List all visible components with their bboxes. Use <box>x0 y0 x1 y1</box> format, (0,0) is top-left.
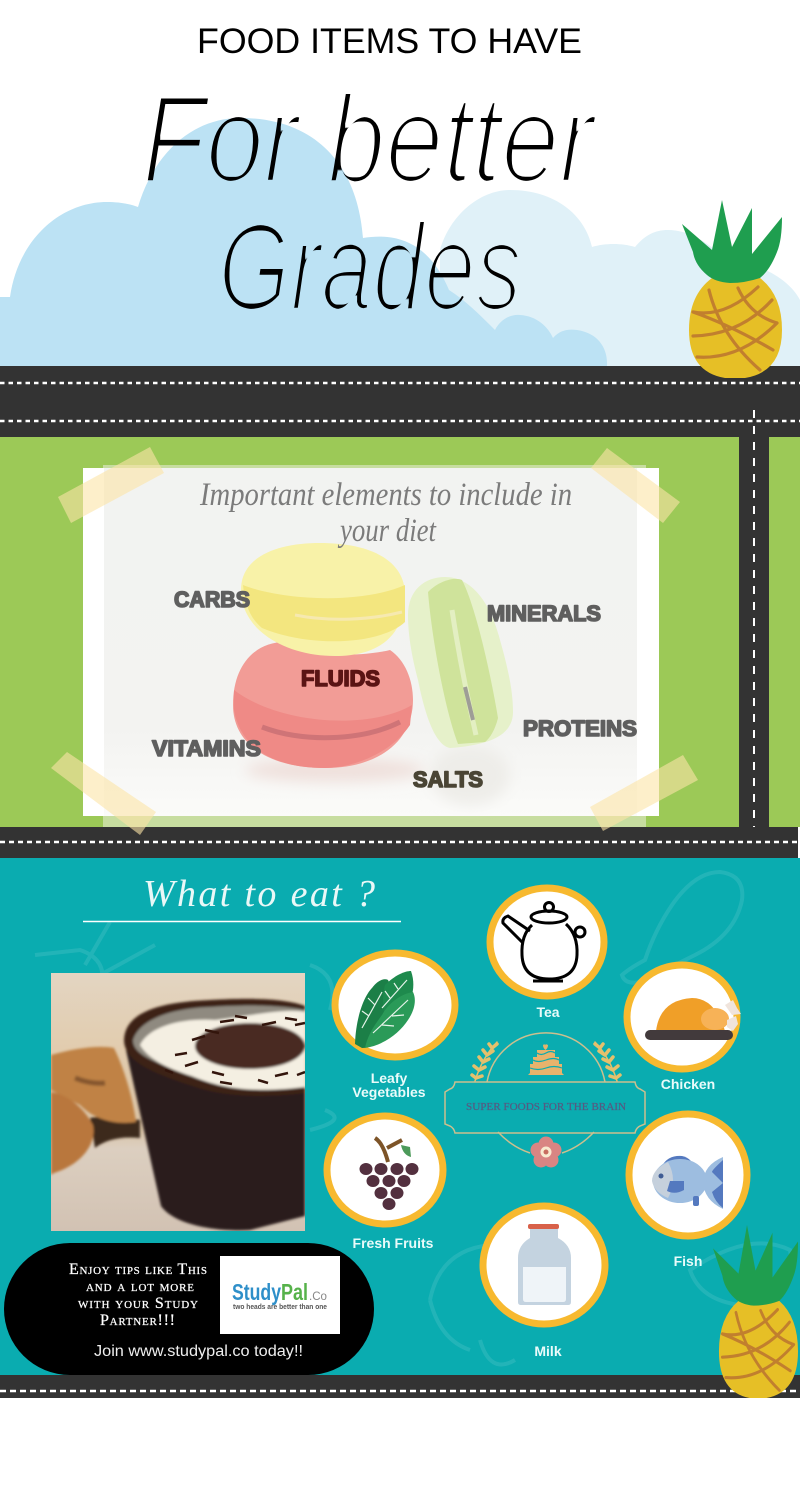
label: tea: Tea <box>536 1004 560 1020</box>
circle: fresh fruits <box>327 1116 443 1224</box>
label: salts: SALTS <box>413 767 483 792</box>
panel: green field <box>0 437 800 827</box>
promo text: with your Study <box>78 1295 198 1312</box>
faint food doodles <box>35 872 791 1364</box>
heading: important elements <box>199 477 572 549</box>
icon: leaves <box>355 971 415 1048</box>
panel: studypal promo <box>4 1243 374 1375</box>
circle: milk <box>483 1206 605 1324</box>
icon: fish <box>652 1156 723 1209</box>
icon: milk bottle <box>518 1224 571 1305</box>
label: leafy vegetables: Leafy <box>371 1070 407 1086</box>
studypal logo: Pal <box>281 1279 308 1305</box>
label: carbs: CARBS <box>174 587 250 612</box>
promo text: Enjoy tips like This <box>69 1261 207 1278</box>
label: fresh fruits: Fresh Fruits <box>353 1235 434 1251</box>
label: chicken: Chicken <box>661 1076 715 1092</box>
label: proteins: PROTEINS <box>523 716 637 741</box>
road: bottom <box>0 1375 800 1398</box>
label: leafy vegetables <box>352 1070 426 1100</box>
photo: coffee and cookies <box>51 973 305 1231</box>
label: milk: Milk <box>534 1343 562 1359</box>
label: minerals: MINERALS <box>487 601 601 626</box>
macaron: pink <box>233 642 413 768</box>
banner <box>445 1082 645 1133</box>
macaron: green <box>408 577 513 748</box>
title: food items: FOOD ITEMS TO HAVE <box>197 22 582 61</box>
icon: pineapple bottom <box>713 1225 798 1398</box>
panel: macaron photo card <box>83 465 659 827</box>
panel: teal section <box>0 858 800 1375</box>
label: leafy vegetables: Vegetables <box>352 1084 426 1100</box>
join text: Join www.studypal.co today!! <box>94 1343 303 1360</box>
label: fluids: FLUIDS <box>301 666 380 691</box>
icon: cake <box>528 1044 564 1075</box>
icon: flower <box>530 1136 562 1168</box>
heading: what to eat: What to eat ? <box>143 873 375 915</box>
heading: important elements: Important elements to include in <box>199 477 572 513</box>
icon: roast chicken <box>645 998 741 1040</box>
studypal logo: two heads are better than one <box>233 1302 327 1311</box>
road: top <box>0 366 800 437</box>
heading: important elements: your diet <box>338 513 437 549</box>
badge: super foods for the brain <box>445 1033 645 1168</box>
promo text: Partner!!! <box>100 1312 175 1329</box>
road: middle <box>0 827 798 858</box>
banner text: SUPER FOODS FOR THE BRAIN <box>466 1102 626 1113</box>
circle: fish <box>629 1114 747 1236</box>
icon: wheat branches <box>472 1042 620 1081</box>
studypal logo: Study <box>232 1279 281 1305</box>
tape strips <box>51 447 698 835</box>
studypal logo <box>220 1256 340 1334</box>
icon: grapes <box>360 1138 418 1210</box>
studypal logo: .Co <box>309 1289 327 1303</box>
macaron: yellow <box>241 543 405 656</box>
icon: teapot <box>503 902 585 981</box>
label: fish: Fish <box>674 1253 702 1269</box>
label: vitamins: VITAMINS <box>152 736 261 761</box>
sprinkles <box>165 1016 305 1084</box>
promo text <box>69 1261 207 1329</box>
icon: pineapple top <box>682 200 782 378</box>
circle: tea <box>490 888 604 996</box>
road: vertical <box>739 410 769 827</box>
circle: leafy vegetables <box>335 953 455 1057</box>
promo text: and a lot more <box>86 1278 194 1295</box>
title script: for better: For better <box>142 71 598 209</box>
clouds <box>0 118 800 366</box>
circle: chicken <box>627 965 741 1069</box>
title script: grades: Grades <box>218 199 522 337</box>
